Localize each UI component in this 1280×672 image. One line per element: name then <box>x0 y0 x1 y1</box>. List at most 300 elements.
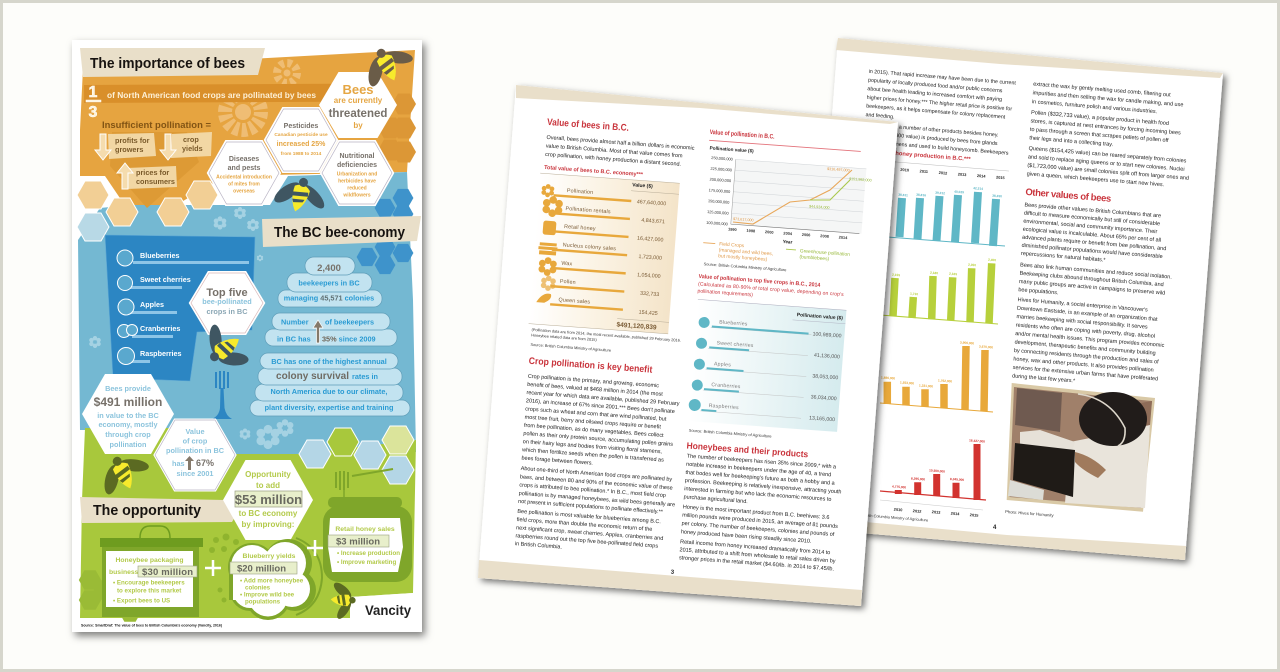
callout: prices for consumers <box>127 166 177 189</box>
panel: blueberry yields cloud: • Improve wild bee <box>240 592 295 598</box>
body text right column: marries beekeeping with social responsibility. It serves <box>1016 314 1148 331</box>
hexagon: nutritional deficiencies: reduced <box>347 186 367 192</box>
intro text: Overall, bees provide almost half a billion dollars in economic <box>546 135 695 152</box>
bar value labels: 3,906,000 <box>960 340 975 346</box>
panel: retail honey jar: Retail honey sales <box>335 526 395 533</box>
panel: top five crops <box>105 235 255 381</box>
panel: honeybee packaging crate: business <box>109 569 139 576</box>
heading: honeybees: Honeybees and their products <box>686 440 809 459</box>
flower decorations <box>89 207 293 449</box>
hexagon: bees provide: in value to the BC <box>97 411 160 420</box>
table footnotes: (Pollination data are from 2014, the most recent available, published 29 February 2016. <box>531 327 681 343</box>
table icons <box>533 184 564 304</box>
icon: honey dipper green <box>336 469 393 497</box>
flower: large <box>225 94 261 130</box>
hexagon: nutritional deficiencies: wildflowers <box>342 192 371 198</box>
table labels: Pollination rentals <box>565 206 611 215</box>
y axis labels: 200,000,000 <box>709 177 731 183</box>
panel: blueberry yields cloud <box>228 538 322 620</box>
crop labels: Cranberries <box>711 382 741 390</box>
bubble dots <box>209 534 239 602</box>
table: top five crops <box>687 299 846 432</box>
crop values: 41,136,000 <box>814 353 840 360</box>
source note and page number <box>847 511 997 531</box>
stat stack: beekeepers: managing 45,571 colonies <box>284 294 374 302</box>
body text right column: development, therapeutic benefits and community building <box>1014 339 1156 357</box>
panel: retail honey jar: • Increase production <box>337 550 400 557</box>
hexagon: value of crop pollination: of crop <box>183 436 208 446</box>
honeybees text: Honey is the most important product from B.C. beehives: 3.6 <box>683 504 830 521</box>
body text right column: bee populations. <box>1018 287 1059 296</box>
heading: top five crops table <box>697 274 845 305</box>
title banner: the opportunity: The opportunity <box>93 502 202 519</box>
page number: 3 <box>671 570 675 576</box>
line chart frame: Year <box>783 239 793 245</box>
body text right column: by connecting residents through the production and sales of <box>1014 348 1159 366</box>
crop pollination text: pollination is by managed honeybees, as wild bees generally are <box>519 491 675 508</box>
hexagon: pesticides: from 1988 to 2014 <box>281 151 322 157</box>
table labels: Pollination <box>567 188 593 196</box>
y axis labels <box>706 155 733 226</box>
source note and page number: Source: British Columbia Ministry of Agriculture <box>847 511 928 522</box>
hexagon: bees provide: pollination <box>110 440 146 449</box>
crop pollination text: from bee pollination, as do many vegetables. Bees collect <box>524 423 664 439</box>
hexagon: top five: bee-pollinated <box>202 297 252 306</box>
y axis labels: 250,000,000 <box>711 155 733 162</box>
crop values <box>806 331 842 423</box>
hexagon: opportunity to add: Opportunity <box>245 470 291 479</box>
heading: top five crops table: pollination requirements) <box>697 288 753 298</box>
heading: insufficient pollination: Insufficient pollination = <box>102 120 211 131</box>
honeybees text: honey produced have been rising steadily since 2010. <box>681 529 812 545</box>
hexagon: nutritional deficiencies <box>322 142 392 204</box>
x axis labels: 2000 <box>765 229 774 235</box>
body text right column: given a queen, which beekeepers use to start new hives. <box>1026 171 1165 188</box>
honeybees text: 2015, attributed to a shift from wholesale to retail sales driven by <box>679 547 836 565</box>
body text right column: Pollen ($332,733 value), a popular product in health food <box>1031 110 1169 127</box>
stat stack: colony survival <box>250 353 410 416</box>
crop pollination text: in British Columbia. <box>515 541 563 551</box>
body text right column: Bees also link human communities and reduce social isolation. <box>1020 262 1172 281</box>
page sheet <box>800 38 1223 560</box>
crop pollination text: About one-third of North American food crops are pollinated by <box>520 466 673 483</box>
crop pollination text: Crop pollination is the primary, and growing, economic <box>528 374 659 389</box>
hexagon: value of crop pollination <box>155 420 235 490</box>
body text right column: impurities and then selling the wax for candle making, and use <box>1032 90 1184 108</box>
crop pollination text <box>514 374 684 559</box>
table footnotes: Honeybee related data are from 2015) <box>531 332 598 342</box>
bar value labels: 10,500,000 <box>929 468 945 474</box>
crop values: 38,053,000 <box>812 373 839 381</box>
hexagon: top five: Top five <box>206 287 248 299</box>
hexagon: bees provide: through crop <box>105 430 151 439</box>
stat stack: growth in beekeepers: Number <box>281 318 309 326</box>
crop pollination text: 2016), an increase of 67% since 2001.*** Bees don't pollinate <box>526 398 675 415</box>
callout: crop yields: crop <box>183 135 199 144</box>
arrow up <box>117 163 133 189</box>
title banner: the opportunity <box>80 497 245 523</box>
icon: bee small <box>328 579 358 622</box>
crop pollination text: bees, and between 80 and 90% of the economic value of these <box>520 474 673 492</box>
body text right column: Queens ($154,425 value) can be reared separately from colonies <box>1028 146 1187 165</box>
bar value labels: 1,886,000 <box>881 375 896 381</box>
bar chart: honey income <box>880 346 993 412</box>
bar value labels: 16,427,000 <box>969 438 985 444</box>
body text right column: their legs and into a collecting tray. <box>1029 135 1114 148</box>
hexagon: diseases and pests: Diseases <box>229 156 259 163</box>
panel: retail honey jar: $3 million <box>336 536 380 548</box>
bar value labels: 2,400 <box>988 258 996 262</box>
poster sheet <box>72 40 422 632</box>
panel: honeybee packaging crate: • Export bees to US <box>113 598 170 604</box>
line chart value labels: $316,497,000 <box>827 167 850 173</box>
hexagon: diseases and pests: overseas <box>233 188 255 194</box>
body text right column: honey, wax and other products. It also provides pollination <box>1013 356 1154 374</box>
body text right column: difficult to measure economically but still of considerable <box>1024 210 1160 227</box>
line chart value labels: $151,992,000 <box>849 177 872 183</box>
stat stack: colony survival: BC has one of the highest annual <box>271 357 387 366</box>
source note and page number: 4 <box>993 525 997 531</box>
section: importance of bees <box>77 38 421 226</box>
crop: raspberries: Raspberries <box>140 349 182 358</box>
x axis labels: 2008 <box>820 233 830 239</box>
y axis labels: 225,000,000 <box>710 166 732 172</box>
stat stack: colony survival: colony survival <box>276 371 349 382</box>
year axis labels <box>894 507 979 518</box>
y axis labels: 125,000,000 <box>707 209 729 216</box>
photo caption: Photo: Hives for Humanity <box>1005 509 1055 518</box>
crop pollination text: bees forage between flowers. <box>521 455 594 467</box>
table labels: Wax <box>561 261 573 267</box>
body text right column: in cosmetics, furniture polish and various industries. <box>1032 99 1158 115</box>
crop pollination text: on their hairy legs and bodies from visiting floral stamens, <box>523 439 663 455</box>
table values: 154,425 <box>638 310 658 317</box>
arrow up <box>185 456 194 470</box>
panel: honeybee packaging crate: $30 million <box>142 567 193 578</box>
x axis labels: 1998 <box>746 228 756 233</box>
hexagon: value of crop pollination: since 2001 <box>177 469 213 478</box>
body text left column: Bees produce a number of other products besides honey. <box>865 122 999 139</box>
crop: apples <box>118 299 177 315</box>
bar value labels: 2,350 <box>968 263 976 267</box>
white corner behind logo <box>350 593 414 619</box>
hexagon: diseases and pests: and pests <box>228 165 260 172</box>
hexagon: top five <box>191 273 263 333</box>
crop pollination text: next significant crop, sweet cherries. Apples, cranberries and <box>516 525 663 542</box>
hexagon: pesticides: Pesticides <box>284 123 318 130</box>
crop labels: Sweet cherries <box>716 340 754 349</box>
crop pollination text: Bee pollination is most valuable for blueberries among B.C. <box>517 509 662 525</box>
hexagon: bees threatened <box>319 72 397 138</box>
crop: cranberries: Cranberries <box>140 324 180 333</box>
crop icons <box>688 316 710 412</box>
table heading: Total value of bees to B.C. economy*** <box>544 165 644 178</box>
line chart value labels <box>733 167 872 222</box>
x axis labels: 2006 <box>802 232 811 238</box>
body text right column: to pass through a screen that scrapes pellets of pollen off <box>1030 127 1169 144</box>
table values: 467,640,000 <box>637 199 666 207</box>
intro text: value to British Columbia. Most of that value comes from <box>546 143 683 159</box>
hexagon: diseases and pests: of mites from <box>228 182 260 188</box>
source note: Source: SmartDraf: The value of bees to British Columbia's economy (Vancity, 2016) <box>81 622 223 628</box>
bar value labels: 4,775,000 <box>892 484 907 490</box>
body text right column: residents who often are coping with poverty, drug, alcohol <box>1016 323 1155 340</box>
icon: bee lower <box>91 446 157 500</box>
fraction one third: 3 <box>89 104 98 121</box>
body text left column: 2015 <box>996 175 1006 180</box>
hexagon: bees provide: $491 million <box>94 395 162 409</box>
callout: profits for growers: growers <box>115 145 143 154</box>
hexagon: value of crop pollination: 67% <box>196 458 214 468</box>
body text right column: Hives for Humanity, a social enterprise in Vancouver's <box>1017 297 1148 314</box>
table values <box>628 199 666 317</box>
body text left column: Wax ($1,054,000 value) is produced by bees from glands <box>864 130 998 147</box>
line chart value labels: $73,617,000 <box>733 217 754 222</box>
crop: sweet cherries <box>118 275 191 290</box>
dark blue honeycomb <box>357 189 413 274</box>
hexagon: diseases and pests <box>209 142 279 204</box>
stat stack: colony survival: rates in <box>352 372 378 381</box>
table labels: Retail honey <box>564 224 596 232</box>
bar value labels: 2,165 <box>949 272 957 276</box>
plus sign <box>307 540 323 556</box>
hexagon: bees provide: economy, mostly <box>98 420 158 429</box>
crop pollination text: crops such as wheat and corn that are wind pollinated, but <box>525 406 667 423</box>
bar value labels: 3,670,000 <box>979 344 994 350</box>
intro text <box>545 135 695 169</box>
table values: 16,427,000 <box>637 236 664 244</box>
one third band: of North American food crops are pollinated by bees <box>107 90 316 100</box>
table values: 1,723,000 <box>638 254 662 262</box>
body text right column: diminished pollinator populations would have considerable <box>1021 243 1163 260</box>
bar value labels <box>881 186 1002 490</box>
chart legend: Greenhouse pollination <box>800 248 850 258</box>
body text left column <box>862 69 1017 181</box>
hexagon: nutritional deficiencies: Nutritional <box>340 153 375 160</box>
paper band bottom <box>800 516 1186 560</box>
body text left column: Managed honey production in B.C.*** <box>869 149 972 163</box>
title banner: BC bee-conomy: The BC bee-conomy <box>274 225 405 241</box>
green honeycomb pattern <box>79 570 141 622</box>
body text left column: about bee health leading to increased comfort with paying <box>867 86 1002 103</box>
hexagon: top five: crops in BC <box>207 307 248 316</box>
body text right column: advanced plants require or benefit from bee pollination, and <box>1022 235 1166 252</box>
year axis labels: 2013 <box>932 509 941 515</box>
hexagon: pesticides <box>266 109 336 171</box>
table labels: Nucleus colony sales <box>562 242 616 252</box>
panel: blueberry yields cloud: • Add more honeybee <box>240 578 304 584</box>
crop labels <box>708 319 756 412</box>
section: BC bee-conomy <box>77 169 421 449</box>
bar value labels: 1,553,000 <box>900 380 915 386</box>
hexagon: opportunity to add <box>223 460 313 540</box>
hexagon: pesticides: Canadian pesticide use <box>274 132 328 138</box>
crop values: 36,034,000 <box>810 394 837 402</box>
x axis labels <box>728 226 848 240</box>
body text right column: many public groups are active in campaigns to preserve wild <box>1019 279 1165 297</box>
bar value labels: 1,710 <box>910 292 918 296</box>
table labels: Queen sales <box>558 297 591 306</box>
pale honeycomb row <box>77 181 218 226</box>
line chart value labels: $44,934,000 <box>809 205 830 210</box>
body text left column: higher prices for honey.*** The higher retail price is positive for <box>867 95 1012 113</box>
crop labels: Blueberries <box>719 320 748 328</box>
crop: apples: Apples <box>140 300 164 309</box>
logo: Vancity: Vancity <box>365 603 411 618</box>
hexagon: bees provide: Bees provide <box>105 384 151 393</box>
table labels: Pollen <box>560 279 576 286</box>
white cloud <box>231 542 310 616</box>
dark cloud outline <box>228 539 316 620</box>
thin row rules <box>700 327 811 419</box>
hexagon: value of crop pollination: pollination in BC <box>166 446 225 455</box>
body text left column: in 2015). That rapid increase may have been due to the current <box>868 69 1017 87</box>
crop pollination text: pollen as their only protein source, accumulating pollen grains <box>523 431 673 448</box>
plus sign <box>205 560 221 576</box>
crop values: 100,989,000 <box>812 331 842 339</box>
bar chart: colonies <box>888 192 1005 246</box>
page sheet <box>478 85 898 606</box>
crop pollination text: which then fertilize seeds when the pollen is transferred as <box>521 447 664 464</box>
fraction one third <box>86 84 101 121</box>
bar value labels: 1,331,000 <box>919 383 934 389</box>
callout: prices for consumers: consumers <box>136 177 175 186</box>
crop labels: Raspberries <box>708 403 739 411</box>
panel: blueberry yields cloud: colonies <box>245 584 271 592</box>
bar value labels: 8,295,000 <box>911 476 926 482</box>
x axis labels: 1990 <box>728 226 737 232</box>
title banner: BC bee-conomy <box>262 216 421 247</box>
honeybees text: interested in farming but who lack the economic resources to <box>684 486 832 503</box>
hexagon: bees threatened: by <box>353 121 363 130</box>
crop: blueberries <box>117 250 249 266</box>
hexagon: opportunity to add: to add <box>256 481 280 490</box>
honeybees text: that bodes well for beekeeping's future as both a hobby and a <box>685 470 836 487</box>
left column content <box>510 117 869 588</box>
body text right column: stores, is captured at nest entrances by forcing incoming bees <box>1030 118 1181 136</box>
y axis labels: 100,000,000 <box>706 220 728 226</box>
body text left column: and feeding. <box>865 112 895 120</box>
orange background <box>80 50 415 210</box>
panel: honeybee packaging crate: Honeybee packaging <box>116 557 184 564</box>
blue background <box>78 172 416 454</box>
year axis labels: 2014 <box>951 511 960 516</box>
fraction one third: 1 <box>89 84 98 101</box>
table bars <box>701 325 809 418</box>
chart legend: but mostly honeybees) <box>718 253 768 263</box>
crop: cranberries <box>118 324 180 338</box>
body text right column: Bees provide other values to British Columbians that are <box>1024 202 1161 219</box>
stat stack: beekeepers: 2,400 <box>317 263 341 274</box>
table bars <box>545 194 631 311</box>
darker central hexagon <box>110 132 199 208</box>
heading: value of bees: Value of bees in B.C. <box>547 117 629 134</box>
table: total value of bees: Value ($) <box>632 182 653 190</box>
crop pollination text: recent year for which data are available, published 29 February <box>526 390 680 407</box>
stat stack: growth in beekeepers <box>265 313 397 346</box>
callout: profits for growers: profits for <box>115 136 150 145</box>
bar value labels: 38,816 <box>916 193 926 197</box>
pale honeycomb <box>299 426 414 484</box>
icon: bee middle <box>269 169 333 222</box>
line chart frame <box>705 155 867 250</box>
honeybees text: stronger prices in the retail market ($4.60/lb. in 2014 to $7.45/lb. <box>679 555 835 573</box>
crop pollination text: field crops, more than double the economic return of the <box>516 517 653 533</box>
stat stack: growth in beekeepers: of beekeepers <box>325 318 374 326</box>
icon: bee by dipper <box>195 315 255 381</box>
arrow down <box>95 134 111 160</box>
table values: 332,733 <box>640 291 659 298</box>
bar value labels: 38,450 <box>992 194 1002 198</box>
crop pollination text: not present in sufficient populations to pollinate effectively.** <box>518 499 664 515</box>
body text right column <box>1012 82 1195 392</box>
chart legend: (bumblebees) <box>799 254 830 262</box>
table labels <box>558 188 621 307</box>
outer ring <box>296 538 322 615</box>
bar value labels: 2,180 <box>930 271 938 275</box>
crop pollination text: crops is attributed to bee pollination.* In B.C., most field crop <box>519 482 666 499</box>
heading: crop pollination: Crop pollination is key benefit <box>528 356 653 376</box>
hexagon: opportunity to add: to BC economy <box>239 509 298 518</box>
body text left column: beekeepers, as it helps compensate for colony replacement <box>866 103 1006 121</box>
body text right column: Beekeeping clubs abound throughout British Columbia, and <box>1019 271 1164 288</box>
heading: top five crops table: (Calculated as 80-90% of total crop value, depending on crop's <box>698 281 844 298</box>
hexagon: bees threatened: threatened <box>329 108 387 120</box>
crop pollination text: most tree fruit, berry and oilseed crops require or benefit <box>524 415 662 431</box>
panel: report page 4 <box>800 38 1223 560</box>
chart legend: (managed and wild bees, <box>718 247 773 257</box>
bar value labels: 2,155 <box>892 273 900 277</box>
heading: top five crops table: Value of pollination to top five crops in B.C., 2014 <box>698 274 821 289</box>
crop: blueberries: Blueberries <box>140 251 180 260</box>
green background <box>80 428 416 618</box>
body text right column: and/or mental health issues. This program provides economic <box>1015 331 1165 349</box>
body text left column: 2013 <box>958 171 967 177</box>
y axis labels: 175,000,000 <box>709 187 730 194</box>
body text right column: extract the wax by gently melting used comb, filtering out <box>1033 82 1171 99</box>
crop: raspberries <box>118 348 182 364</box>
source note: Source: British Columbia Ministry of Agriculture <box>689 428 773 439</box>
hexagon: bees threatened: are currently <box>334 96 383 105</box>
paper band bottom <box>478 560 862 606</box>
callout: crop yields: yields <box>182 144 203 153</box>
table values: 4,843,671 <box>641 218 665 225</box>
chart axis title: Pollination value ($) <box>709 145 754 154</box>
table: total value of bees: $491,120,839 <box>616 322 657 331</box>
source note: Source: British Columbia Ministry of Agriculture <box>703 261 787 272</box>
title banner: importance of bees <box>80 48 265 77</box>
panel: retail honey jar <box>323 497 412 582</box>
stat stack: beekeepers <box>278 257 382 307</box>
body text left column: 2010 <box>900 167 909 173</box>
stat stack: colony survival: plant diversity, expertise and training <box>265 403 393 412</box>
one third band <box>84 84 332 103</box>
pale hexagon <box>77 213 109 241</box>
x axis labels: 2004 <box>783 231 793 236</box>
crop values: 13,165,000 <box>809 415 835 423</box>
body text right column: Downtown Eastside, is an example of an organization that <box>1017 306 1158 323</box>
paper band top <box>516 85 898 124</box>
callout: profits for growers <box>108 133 156 159</box>
icon: honey dipper <box>212 371 232 419</box>
hexagon: bees threatened: Bees <box>342 82 374 97</box>
stat stack: growth in beekeepers: in BC has <box>277 334 311 344</box>
line chart series <box>733 170 852 224</box>
table footnotes: Source: British Columbia Ministry of Agriculture <box>530 342 611 353</box>
body text right column: ($1,723,000 value) are small colonies split off from larger ones and <box>1027 163 1189 182</box>
panel: infographic poster <box>72 38 422 632</box>
heading: value of pollination chart: Value of pollination in B.C. <box>710 129 775 141</box>
